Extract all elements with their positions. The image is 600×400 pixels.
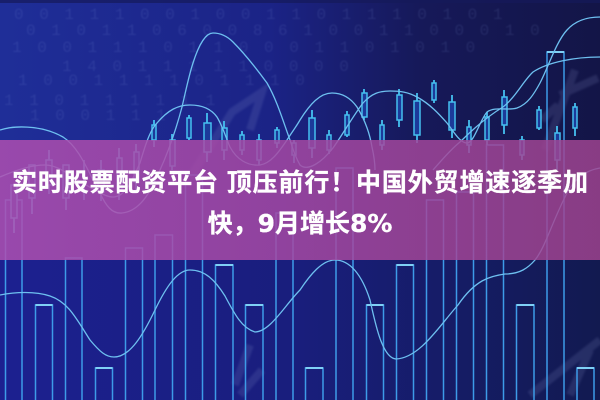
binary digits backdrop: 1 4 0 1 1 1 1 1 0 0 0 0 bbox=[62, 58, 352, 76]
binary digits backdrop: 0 1 0 1 1 0 6 0 0 8 6 1 0 0 1 1 0 0 0 1 0 bbox=[26, 22, 543, 40]
watermark arrows bbox=[190, 70, 600, 395]
purple title band bbox=[0, 140, 600, 260]
binary digits backdrop: 1 0 0 1 1 1 1 0 1 1 1 0 bbox=[18, 72, 308, 90]
binary digits backdrop bbox=[4, 6, 543, 125]
binary digits backdrop: 1 0 0 1 1 1 bbox=[30, 107, 169, 125]
binary digits backdrop: 0 0 1 1 1 0 0 1 0 0 1 1 0 1 1 1 0 1 0 1 bbox=[14, 6, 505, 24]
binary digits backdrop: 1 1 0 1 1 1 1 1 1 bbox=[4, 92, 218, 110]
candlestick chart bbox=[11, 80, 577, 233]
binary digits backdrop: 1 0 0 1 1 1 0 1 1 0 0 0 1 1 0 1 0 1 0 bbox=[12, 39, 478, 57]
headline line 2: 快，9月增长8% bbox=[208, 209, 392, 238]
headline line 1: 实时股票配资平台 顶压前行！中国外贸增速逐季加 bbox=[12, 168, 588, 197]
